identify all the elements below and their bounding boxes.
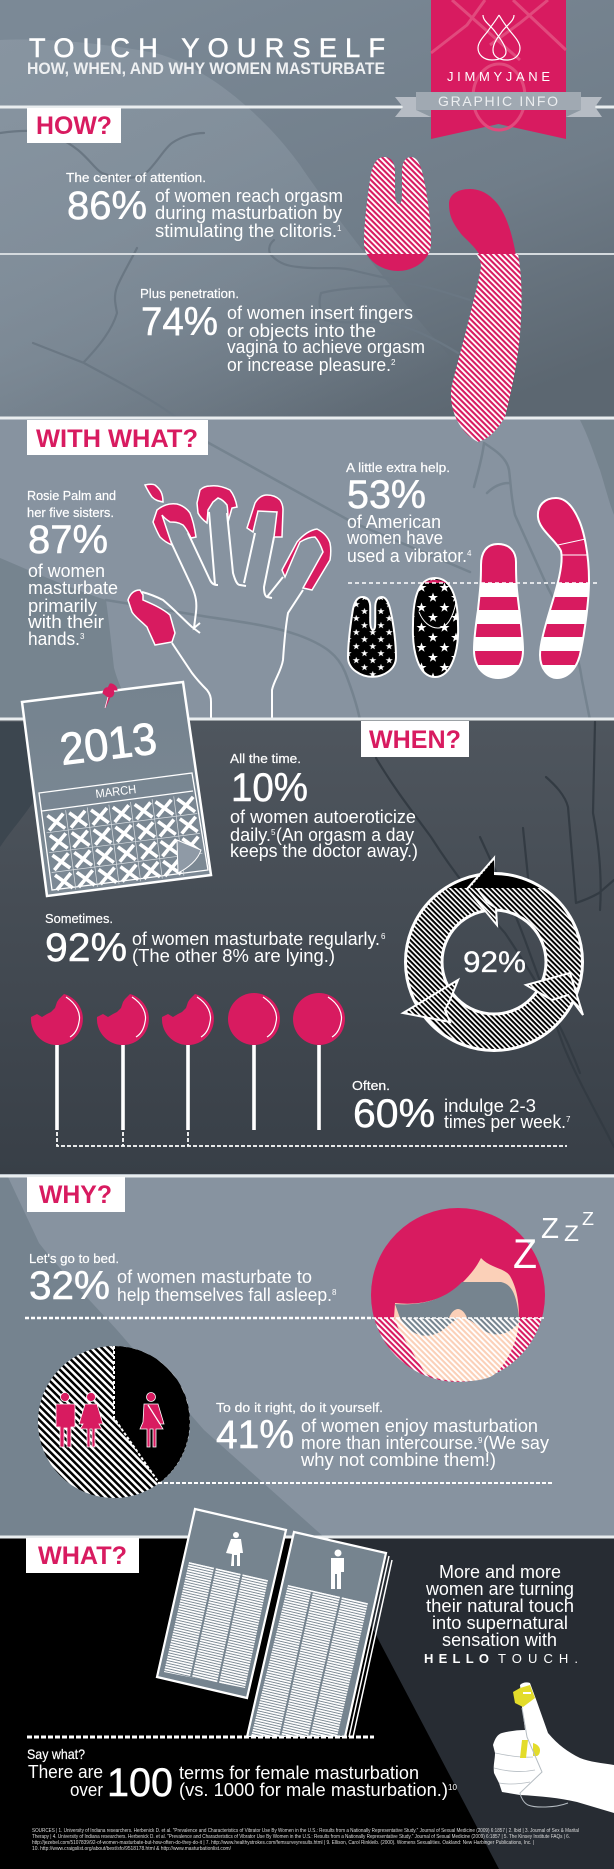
text block: hello touch promo: into supernatural: [432, 1613, 568, 1633]
text block: penetration stat: or increase pleasure.: [227, 355, 391, 375]
text block: vibrator stat: A little extra help.: [346, 460, 450, 475]
icon: sleep Z letters: Z: [564, 1221, 579, 1246]
text block: daily stat: keeps the doctor away.): [230, 841, 418, 861]
text block: sleep stat: of women masturbate to: [117, 1267, 312, 1287]
text block: say what: terms for female masturbation: [179, 1763, 419, 1783]
panel: what: [0, 1509, 614, 1869]
chart: vibrators flag pattern: [348, 495, 600, 680]
text block: hands stat: her five sisters.: [27, 505, 114, 520]
text block: daily stat: daily.: [230, 825, 271, 845]
lollipop 1 bitten: [31, 994, 83, 1130]
text block: sleep stat: Let's go to bed.: [29, 1251, 119, 1266]
text block: intercourse stat: 41%: [216, 1413, 294, 1457]
text block: daily stat: 5: [271, 828, 276, 837]
panel: how: [0, 0, 614, 442]
title: TOUCH YOURSELF: [29, 33, 385, 63]
chart: lollipops: [31, 993, 567, 1146]
heading: when: [361, 721, 469, 757]
text block: vibrator stat: women have: [346, 528, 443, 548]
text block: clitoris stat: 86%: [67, 184, 147, 228]
text block: sources: 10. http://www.craigslist.org/about/best/sfo/9518178.html & http://www.masturbationlist.com/: [32, 1846, 231, 1852]
text block: regularly stat: (The other 8% are lying.): [132, 946, 335, 966]
text block: penetration stat: vagina to achieve orgasm: [227, 337, 425, 357]
text block: daily stat: [230, 751, 418, 861]
icon: calendar march 2013: MARCH: [95, 782, 137, 801]
text block: penetration stat: [140, 286, 425, 375]
text block: hands stat: of women: [28, 561, 105, 581]
text block: vibrator stat: 53%: [347, 473, 426, 517]
text block: hello touch promo: HELLO: [424, 1651, 489, 1666]
icon: woman alone: [140, 1392, 164, 1447]
text block: say what: 10: [448, 1783, 457, 1792]
text block: penetration stat: Plus penetration.: [140, 286, 239, 301]
chart: cycle ring 92 percent: [403, 858, 583, 1050]
text block: intercourse stat: more than intercourse.: [301, 1433, 478, 1453]
text block: regularly stat: of women masturbate regularly.: [132, 929, 380, 949]
title: HOW, WHEN, AND WHY WOMEN MASTURBATE: [27, 60, 385, 78]
text block: clitoris stat: 1: [337, 224, 342, 233]
text block: say what: [27, 1746, 457, 1805]
panel: when: [0, 682, 614, 1174]
heading: when: WHEN?: [369, 726, 461, 754]
text block: hands stat: masturbate: [28, 578, 118, 598]
text block: regularly stat: [45, 911, 386, 970]
text block: per week stat: 7: [566, 1115, 571, 1124]
text block: hello touch promo: women are turning: [425, 1579, 574, 1599]
lollipop 4 whole: [228, 993, 280, 1130]
heading: how: [27, 108, 121, 143]
text block: vibrator stat: of American: [347, 512, 441, 532]
text block: sleep stat: [29, 1251, 337, 1308]
text block: hands stat: 3: [80, 632, 85, 641]
text block: hands stat: with their: [27, 612, 104, 632]
icon: sleep Z letters: Z: [513, 1230, 537, 1277]
icon: two-prong vibrator: [364, 157, 431, 271]
panel: with what: [0, 418, 614, 720]
arrow: cycle right: [526, 973, 583, 1015]
chart: pie 41 percent: [38, 1346, 190, 1498]
icon: calendar march 2013: 2013: [57, 712, 159, 775]
text block: penetration stat: of women insert fingers: [227, 303, 413, 323]
text block: clitoris stat: during masturbation by: [155, 203, 342, 223]
text block: vibrator stat: [346, 460, 472, 566]
vibrator: stars bulb: [413, 578, 458, 677]
icon: man figure: [331, 1550, 344, 1589]
lollipop 5 whole: [293, 993, 345, 1130]
text block: say what: 100: [107, 1761, 173, 1805]
text block: hands stat: 87%: [28, 518, 108, 562]
text block: sources: [32, 1828, 579, 1852]
arrow: cycle left: [403, 980, 458, 1022]
text block: daily stat: All the time.: [230, 751, 301, 766]
calendar grid of crossed days: [44, 794, 205, 892]
text block: say what: There are: [28, 1762, 103, 1782]
icon: sleep Z letters: Z: [582, 1209, 594, 1229]
arrow: cycle top: [467, 858, 497, 925]
text block: say what: (vs. 1000 for male masturbation.): [179, 1780, 448, 1800]
logo ribbon: jimmyjane: JIMMYJANE: [447, 69, 550, 84]
heading: with what: WITH WHAT?: [36, 425, 198, 453]
text block: hello touch promo: More and more: [439, 1562, 561, 1582]
text block: daily stat: 10%: [231, 766, 308, 810]
lollipop 2 bitten: [97, 994, 149, 1130]
icon: sleep Z letters: Z: [541, 1213, 559, 1245]
icon: curved vibrator: [449, 189, 522, 442]
icon: hand with painted nails: [128, 484, 331, 718]
icon: book of male terms: [247, 1532, 392, 1737]
text block: vibrator stat: used a vibrator.: [347, 546, 467, 566]
text block: say what: over: [70, 1780, 103, 1800]
icon: woman: [79, 1392, 103, 1447]
icon: calendar march 2013: [22, 682, 211, 896]
icon: push pin: [103, 684, 117, 708]
text block: daily stat: (An orgasm a day: [276, 825, 414, 845]
text block: clitoris stat: stimulating the clitoris.: [155, 221, 337, 241]
heading: how: HOW?: [36, 112, 112, 140]
icon: thumbs up with hello touch: [493, 1682, 614, 1813]
icon: woman figure: [226, 1532, 243, 1566]
icon: sleeping woman with mask: [371, 1208, 545, 1382]
text block: regularly stat: 92%: [45, 926, 127, 970]
icon: book of female terms: [157, 1509, 286, 1698]
text block: penetration stat: 2: [391, 358, 396, 367]
text block: say what: Say what?: [27, 1746, 85, 1762]
text block: sleep stat: help themselves fall asleep.: [117, 1285, 332, 1305]
lollipop 3 bitten: [162, 994, 214, 1130]
vibrator: stripes curved: [536, 497, 590, 679]
text block: intercourse stat: 9: [478, 1436, 483, 1445]
text block: sources: http://jezebel.com/5107839/92-of-women-masturbate-but-how-often-do-they-do-it | 7. http://www.healthystrokes.com/femsurveyresults.html | 9. Ellison, Carol Rinkleib. (2000). Womens Sexualities. Oakland: New Harbinger Publications, Inc. |: [32, 1840, 534, 1846]
vibrator: stars two-prong: [348, 597, 396, 677]
chart: cycle ring 92 percent: 92%: [463, 946, 526, 979]
text block: hello touch promo: TOUCH.: [498, 1651, 578, 1666]
text block: regularly stat: 6: [381, 932, 386, 941]
icon: man: [56, 1392, 75, 1447]
title: [27, 33, 385, 78]
text block: intercourse stat: [216, 1400, 549, 1470]
heading: why: WHY?: [39, 1181, 112, 1209]
text block: hands stat: Rosie Palm and: [27, 488, 116, 503]
text block: hands stat: [27, 488, 118, 649]
ribbon band: graphic info: [395, 92, 602, 117]
heading: what: WHAT?: [38, 1542, 127, 1570]
heading: why: [27, 1177, 125, 1212]
text block: per week stat: 60%: [353, 1092, 435, 1136]
heading: what: [26, 1538, 139, 1573]
text block: hands stat: primarily: [28, 596, 97, 616]
panel: why: [0, 1174, 614, 1538]
text block: vibrator stat: 4: [467, 549, 472, 558]
ribbon band: graphic info: GRAPHIC INFO: [438, 93, 558, 109]
icon: sleep Z letters: [513, 1209, 594, 1277]
logo ribbon: jimmyjane: [395, 0, 602, 139]
text block: hello touch promo: their natural touch: [426, 1596, 574, 1616]
text block: intercourse stat: To do it right, do it yourself.: [216, 1400, 383, 1415]
text block: hello touch promo: sensation with: [442, 1630, 557, 1650]
text block: penetration stat: or objects into the: [227, 321, 376, 341]
text block: clitoris stat: [66, 170, 343, 241]
text block: clitoris stat: The center of attention.: [66, 170, 206, 185]
text block: intercourse stat: (We say: [483, 1433, 549, 1453]
text block: per week stat: times per week.: [444, 1112, 566, 1132]
text block: daily stat: of women autoeroticize: [230, 807, 416, 827]
text block: sleep stat: 8: [332, 1288, 337, 1297]
text block: per week stat: Often.: [352, 1078, 390, 1093]
text block: sleep stat: 32%: [29, 1264, 110, 1308]
text block: penetration stat: 74%: [141, 300, 218, 344]
text block: hello touch promo: [424, 1562, 578, 1666]
vibrator: stripes straight: [473, 543, 524, 679]
text block: per week stat: indulge 2-3: [444, 1096, 536, 1116]
text block: hands stat: hands.: [28, 629, 80, 649]
icon: jimmyjane logo: [478, 15, 520, 60]
text block: regularly stat: Sometimes.: [45, 911, 113, 926]
text block: intercourse stat: of women enjoy masturbation: [301, 1416, 538, 1436]
text block: clitoris stat: of women reach orgasm: [155, 186, 343, 206]
text block: per week stat: [352, 1078, 571, 1136]
text block: intercourse stat: why not combine them!): [300, 1450, 496, 1470]
